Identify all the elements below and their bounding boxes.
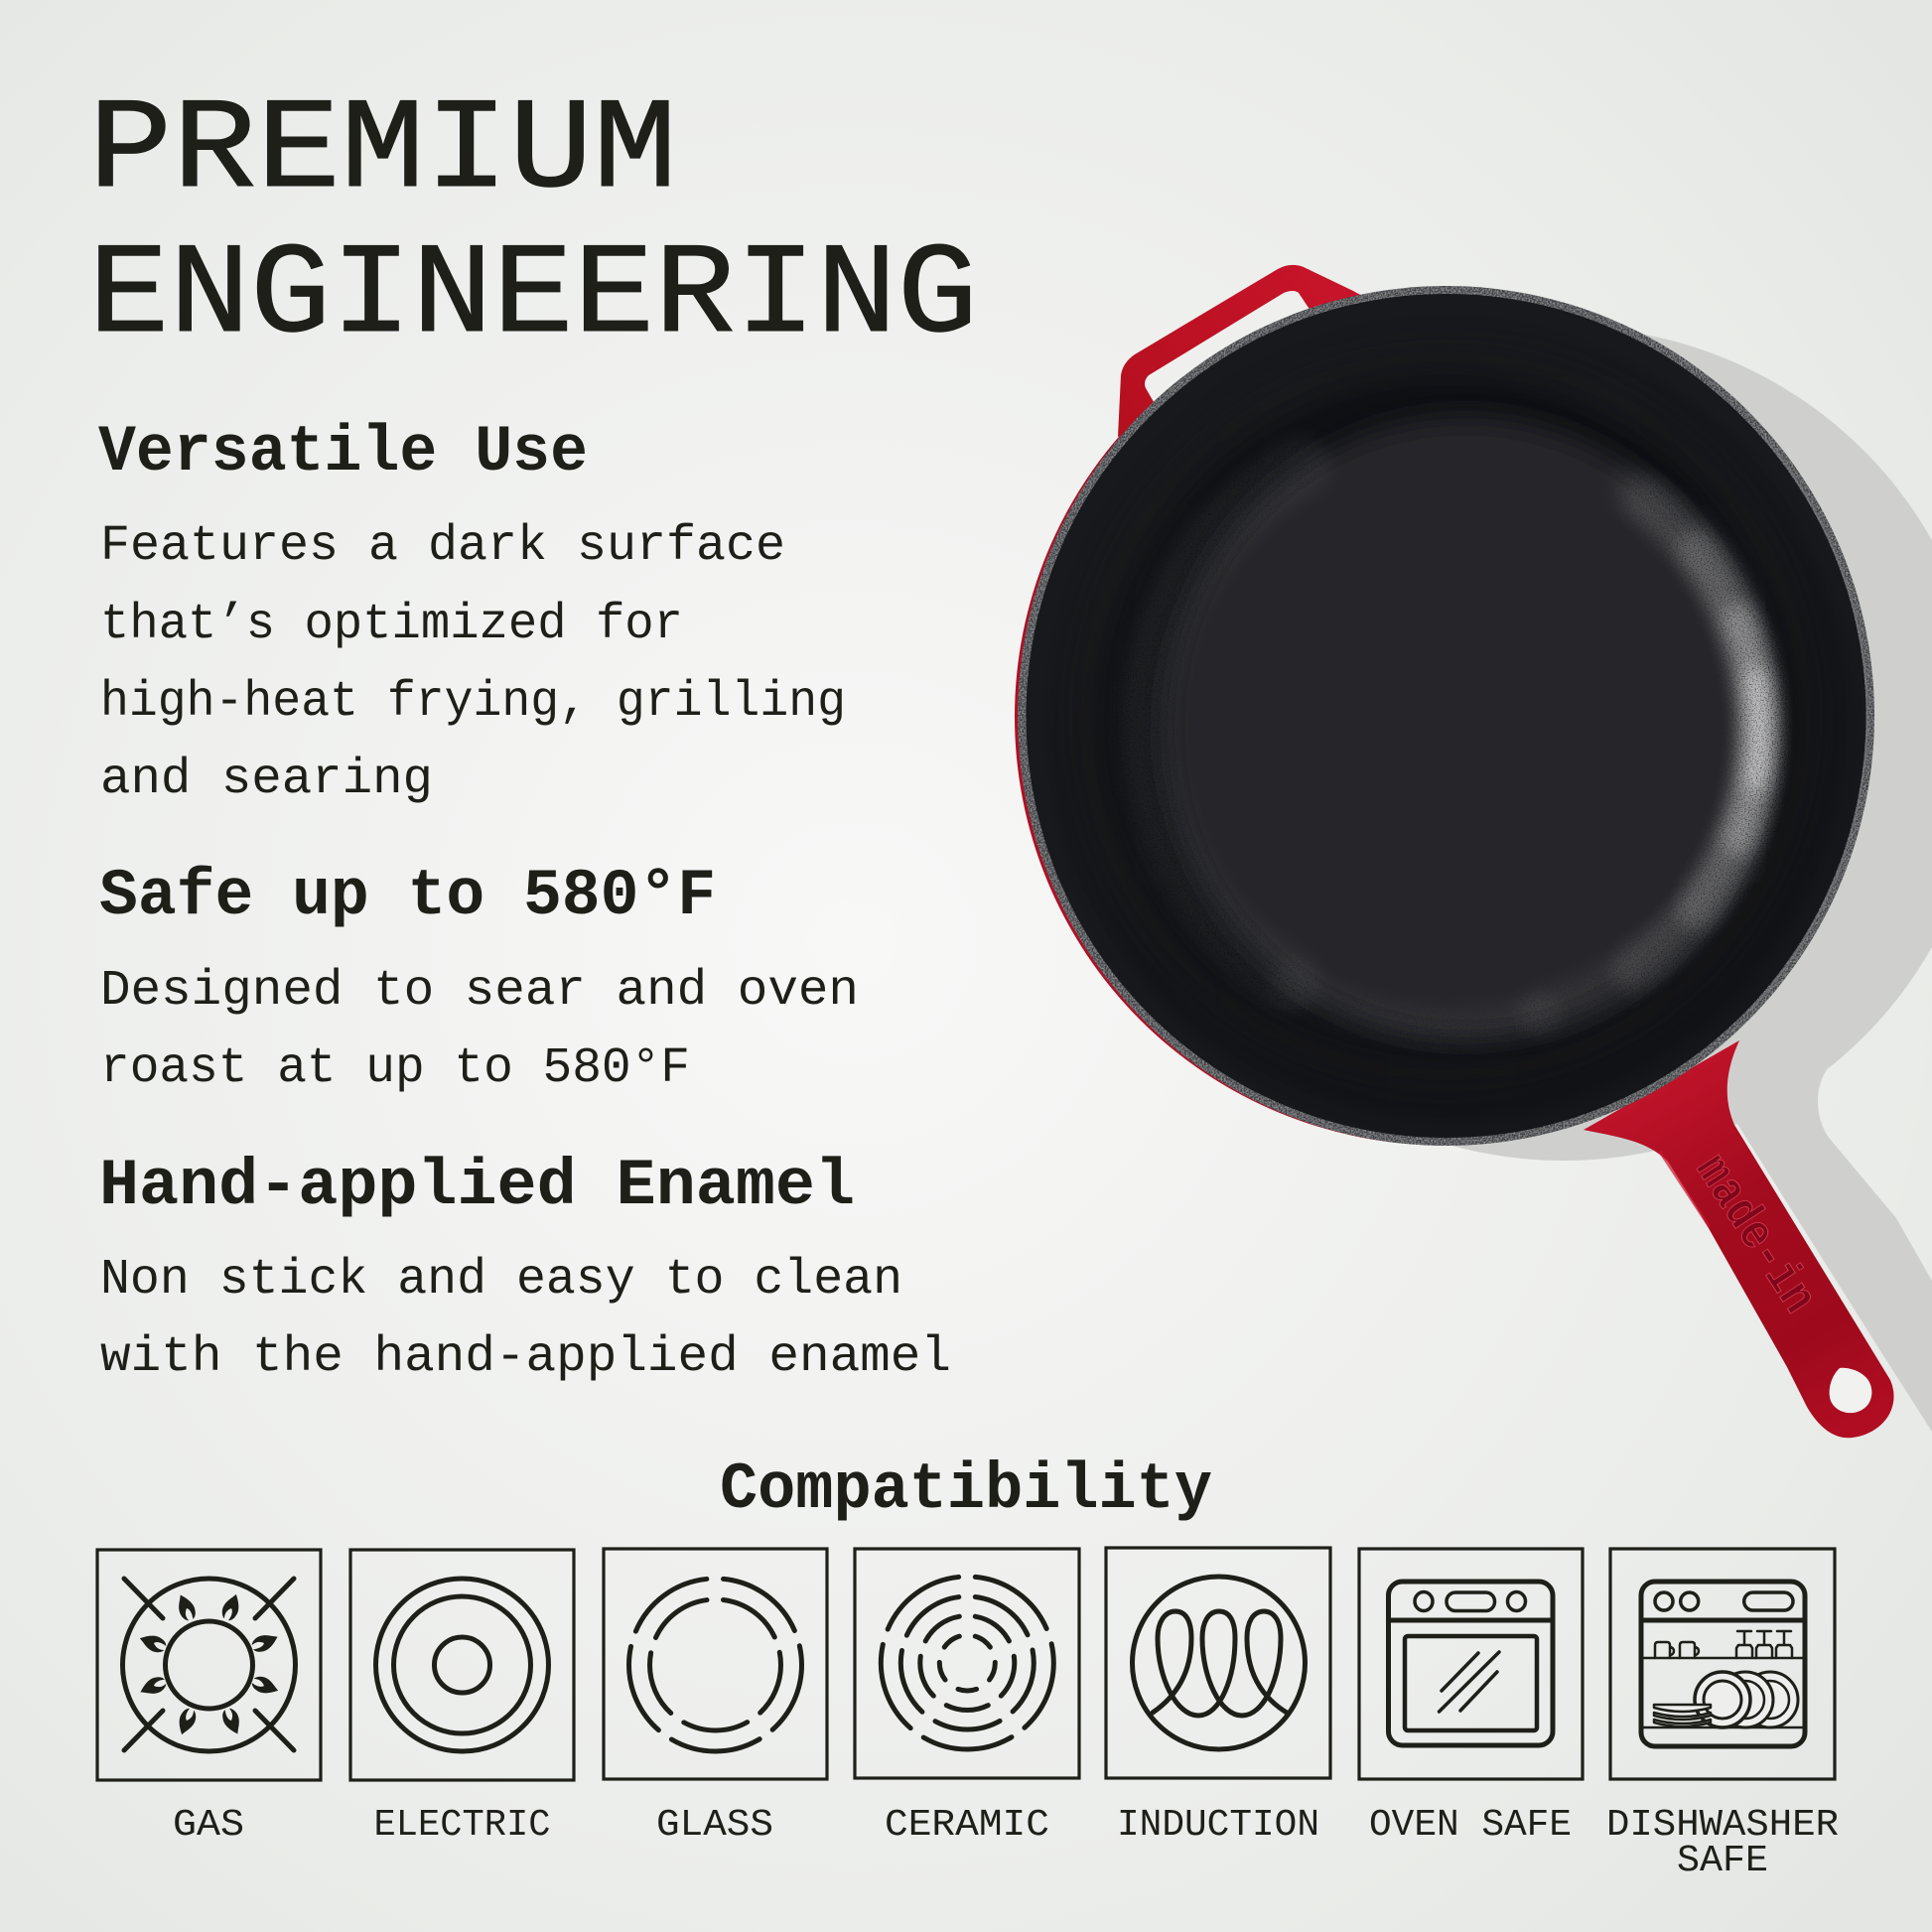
label bbox=[1606, 1804, 1839, 1882]
box bbox=[1610, 1549, 1835, 1779]
box bbox=[350, 1550, 574, 1780]
label: GLASS bbox=[656, 1804, 773, 1847]
highlight arc 2 bbox=[1635, 501, 1758, 970]
box bbox=[604, 1549, 827, 1779]
compatibility: dishwasher safe bbox=[1606, 1549, 1839, 1882]
box bbox=[1106, 1548, 1330, 1778]
highlight arc 1 bbox=[1543, 489, 1760, 1014]
box bbox=[855, 1549, 1079, 1778]
text: enamel description bbox=[100, 1252, 951, 1386]
side handle bbox=[1118, 265, 1362, 437]
label: SAFE bbox=[1677, 1840, 1768, 1882]
heading: compatibility: Compatibility bbox=[720, 1452, 1212, 1527]
compatibility: electric bbox=[350, 1550, 574, 1847]
section: safe up to 580F bbox=[99, 859, 859, 1097]
text: versatile use description: high-heat frying, grilling bbox=[100, 674, 846, 731]
text: versatile use description: that’s optimized for bbox=[100, 597, 683, 653]
pan well bbox=[1027, 294, 1866, 1138]
interior shading bbox=[1121, 411, 1793, 1053]
long handle bbox=[1584, 1040, 1894, 1438]
text: safe description: roast at up to 580°F bbox=[100, 1040, 690, 1097]
icon: ceramic hob bbox=[881, 1577, 1053, 1749]
highlight arc 5 bbox=[1755, 679, 1760, 780]
handle edge highlight bbox=[1660, 1152, 1710, 1227]
brand emboss: made-in bbox=[1683, 1146, 1826, 1324]
wall light band bbox=[1086, 356, 1805, 1075]
heading: safe up to 580F: Safe up to 580°F bbox=[99, 859, 716, 933]
speckle glow left bbox=[1147, 467, 1301, 983]
compatibility: ceramic bbox=[855, 1549, 1079, 1847]
text: versatile use description: and searing bbox=[100, 752, 433, 808]
handle hole: hanging bbox=[1830, 1368, 1871, 1413]
title: PREMIUM bbox=[88, 79, 677, 225]
heading: versatile use: Versatile Use bbox=[98, 415, 588, 489]
flat cooking surface bbox=[1168, 418, 1763, 1037]
icon: oven bbox=[1388, 1582, 1553, 1745]
text: safe description bbox=[100, 963, 859, 1097]
text: enamel description: Non stick and easy to clean bbox=[100, 1252, 902, 1309]
rim light bbox=[1747, 437, 1867, 1013]
pan shadow bbox=[1142, 327, 1932, 1432]
highlight arc 4 bbox=[1738, 620, 1760, 840]
box bbox=[1359, 1549, 1583, 1779]
title: ENGINEERING bbox=[88, 224, 978, 370]
highlight arc 3 bbox=[1698, 549, 1760, 910]
compatibility: induction bbox=[1106, 1548, 1330, 1847]
compatibility: glass bbox=[604, 1549, 827, 1847]
text: versatile use description bbox=[100, 518, 846, 808]
label: GAS bbox=[173, 1804, 244, 1847]
compatibility: gas bbox=[97, 1550, 321, 1847]
icon: gas burner bbox=[123, 1579, 296, 1751]
title bbox=[88, 79, 978, 370]
label: CERAMIC bbox=[885, 1804, 1049, 1847]
label: ELECTRIC bbox=[373, 1804, 550, 1847]
section: hand-applied enamel bbox=[99, 1149, 951, 1386]
box bbox=[97, 1550, 321, 1780]
speckle glow bottom bbox=[1291, 983, 1542, 1029]
compatibility: oven safe bbox=[1359, 1549, 1583, 1847]
section: versatile use bbox=[98, 415, 846, 808]
illustration: red enamel skillet bbox=[1015, 265, 1894, 1438]
text: versatile use description: Features a dark surface bbox=[100, 518, 785, 575]
text: enamel description: with the hand-applied enamel bbox=[100, 1329, 951, 1386]
icon: electric coil bbox=[375, 1579, 548, 1751]
heading: hand-applied enamel: Hand-applied Enamel bbox=[99, 1149, 855, 1223]
label: DISHWASHER bbox=[1606, 1804, 1839, 1847]
side handle opening bbox=[1145, 291, 1312, 407]
text: safe description: Designed to sear and oven bbox=[100, 963, 859, 1020]
red pan body bbox=[1015, 288, 1870, 1146]
icon: glass hob bbox=[629, 1579, 802, 1751]
icon: dishwasher bbox=[1641, 1582, 1805, 1746]
label: OVEN SAFE bbox=[1369, 1804, 1572, 1847]
label: INDUCTION bbox=[1117, 1804, 1319, 1847]
pan rim bbox=[1018, 286, 1874, 1146]
icon: induction coil bbox=[1132, 1577, 1305, 1749]
